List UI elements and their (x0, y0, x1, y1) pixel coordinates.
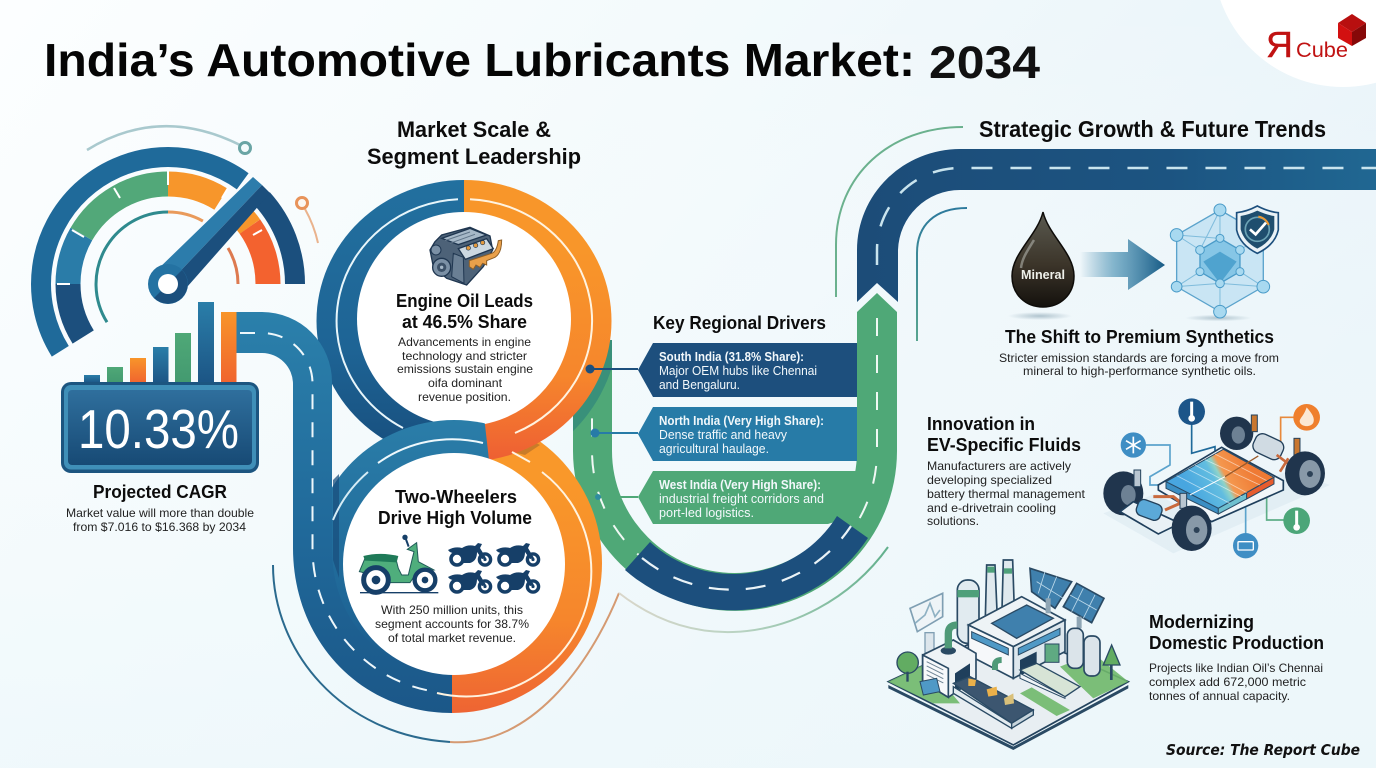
navy top road (857, 149, 1376, 302)
cagr value box (61, 382, 259, 473)
text: projected cagr: Market value will more than double (66, 506, 254, 520)
text: premium synthetics: Stricter emission standards are forcing a move from (999, 351, 1279, 365)
logo: RCube: Cube (1296, 39, 1348, 62)
text: domestic production: tonnes of annual capacity. (1149, 689, 1290, 703)
heading: strategic growth: Strategic Growth & Future Trends (979, 116, 1326, 142)
engine icon (430, 227, 502, 285)
gauge inner arcs (96, 212, 238, 322)
heading: market scale: Market Scale & (397, 117, 551, 142)
banner: south india: and Bengaluru. (659, 378, 740, 392)
icon: mineral oil drop (1008, 212, 1074, 320)
text: engine oil body: Advancements in engine (398, 335, 531, 349)
banner: north india: agricultural haulage. (659, 442, 769, 456)
icon: mineral oil drop: Mineral (1021, 268, 1065, 282)
text: premium synthetics (999, 326, 1279, 378)
text: two-wheelers body: segment accounts for 38.7% (375, 617, 529, 631)
cagr value box: 10.33% (78, 398, 239, 460)
left road (236, 312, 452, 713)
heading: market scale (367, 117, 581, 169)
gauge needle (148, 177, 270, 304)
text: projected cagr (66, 482, 254, 534)
text: ev fluids: solutions. (927, 514, 979, 528)
panel: lower ring orange half (452, 442, 602, 713)
thin decorative lines (273, 127, 967, 742)
decorative arc right with orange node (296, 198, 318, 243)
text: two-wheelers body: With 250 million units, this (381, 603, 523, 617)
heading: market scale: Segment Leadership (367, 144, 581, 169)
text: engine oil heading: at 46.5% Share (402, 311, 527, 332)
heading: key regional drivers: Key Regional Drivers (653, 313, 826, 333)
text: ev fluids (927, 413, 1086, 528)
gauge outer ring (41, 157, 295, 351)
banner: west india (638, 471, 857, 524)
panel: upper ring engine oil (316, 180, 612, 462)
icon: EV chassis with thermal icons (1103, 398, 1330, 558)
text: premium synthetics: mineral to high-performance synthetic oils. (1023, 364, 1256, 378)
banner: south india: South India (31.8% Share): (659, 350, 804, 364)
icon: green scooter (359, 535, 438, 593)
text: engine oil body (397, 335, 533, 404)
logo: RCube: Я (1266, 24, 1293, 65)
gauge (41, 126, 318, 351)
text: two-wheelers heading: Two-Wheelers (395, 486, 517, 507)
text: ev fluids: developing specialized (927, 473, 1052, 487)
icon: isometric factory (888, 560, 1128, 750)
text: ev fluids: EV-Specific Fluids (927, 434, 1081, 455)
text: ev fluids: and e-drivetrain cooling (927, 501, 1056, 515)
text: engine oil body: technology and stricter (402, 349, 527, 363)
text: domestic production: Projects like Indian Oil’s Chennai (1149, 661, 1323, 675)
icon: synthetic crystal with shield (1170, 204, 1278, 321)
arrow: mineral to synthetic (1080, 239, 1165, 290)
green road with arrow tip (573, 293, 897, 611)
text: engine oil body: oifa dominant (428, 376, 503, 390)
text: two-wheelers body: of total market revenue. (388, 631, 516, 645)
text: domestic production (1149, 611, 1324, 703)
lower ring white interior (333, 439, 591, 696)
panel: lower ring blue band (332, 420, 489, 666)
banner: west india: West India (Very High Share): (659, 478, 821, 492)
gauge colored segments (57, 171, 268, 337)
text: engine oil heading (396, 290, 533, 332)
text: domestic production: Domestic Production (1149, 632, 1324, 653)
text: ev fluids: Innovation in (927, 413, 1035, 434)
text: engine oil heading: Engine Oil Leads (396, 290, 533, 311)
banner: north india (638, 407, 857, 461)
dots and connector lines to banners (586, 364, 638, 500)
text: two-wheelers heading (378, 486, 532, 528)
banner: north india: Dense traffic and heavy (659, 428, 788, 442)
text: engine oil body: revenue position. (418, 390, 511, 404)
text: two-wheelers body (375, 603, 529, 645)
text: two-wheelers heading: Drive High Volume (378, 507, 532, 528)
banner: north india: North India (Very High Share): (659, 414, 824, 428)
text: premium synthetics: The Shift to Premium Synthetics (1005, 326, 1274, 347)
banner: south india: Major OEM hubs like Chennai (659, 364, 817, 378)
text: domestic production: Modernizing (1149, 611, 1254, 632)
decorative arc top with teal node (87, 126, 250, 154)
icon: four motorcycles (448, 543, 539, 592)
logo: RCube (1213, 0, 1376, 87)
title: India’s Automotive Lubricants Market: (44, 34, 915, 86)
title: 2034 (929, 37, 1040, 88)
banner: west india: port-led logistics. (659, 506, 754, 520)
text: domestic production: complex add 672,000 metric (1149, 675, 1306, 689)
source note: Source: The Report Cube (1166, 741, 1360, 759)
banner: west india: industrial freight corridors and (659, 492, 824, 506)
text: projected cagr: from $7.016 to $16.368 by 2034 (73, 520, 246, 534)
text: ev fluids: Manufacturers are actively (927, 459, 1071, 473)
text: engine oil body: emissions sustain engine (397, 362, 533, 376)
bar chart (84, 302, 236, 383)
text: projected cagr: Projected CAGR (93, 482, 227, 502)
banner: south india (638, 343, 857, 397)
text: ev fluids: battery thermal management (927, 487, 1086, 501)
navy road section of U-curve (625, 516, 868, 610)
